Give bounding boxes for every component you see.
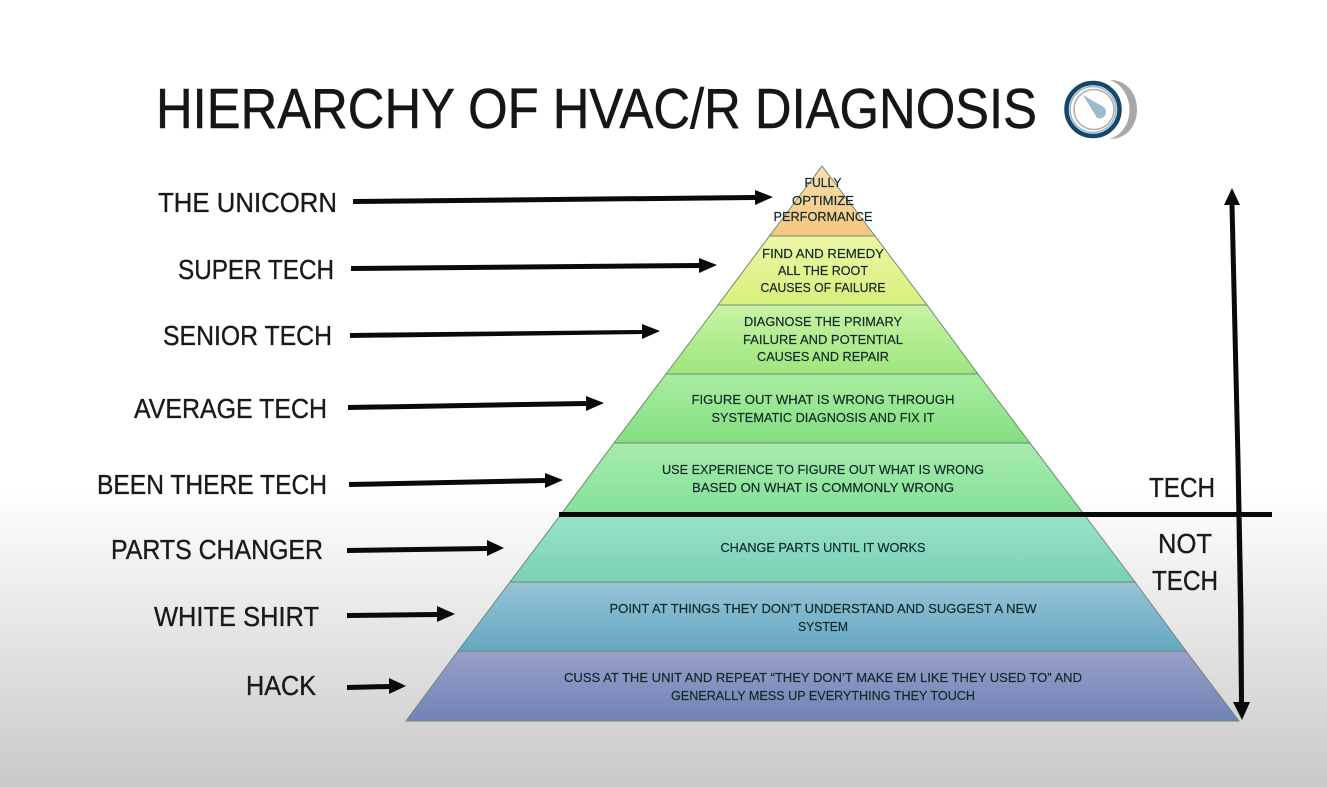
pyramid tier text: DIAGNOSE THE PRIMARY <box>744 314 902 329</box>
pyramid tier text <box>564 175 1082 703</box>
arrows from labels to tiers <box>347 190 773 694</box>
pyramid tier text: GENERALLY MESS UP EVERYTHING THEY TOUCH <box>671 688 975 703</box>
tech label: TECH <box>1149 472 1215 503</box>
pyramid tier text: FAILURE AND POTENTIAL <box>743 332 903 347</box>
tier 2: find and remedy <box>718 236 927 305</box>
pyramid tier text: ALL THE ROOT <box>778 263 868 278</box>
tier labels: WHITE SHIRT <box>154 601 319 632</box>
pyramid tier text: SYSTEM <box>798 619 848 634</box>
tier 5: use experience <box>562 443 1083 513</box>
tier labels: SUPER TECH <box>178 254 334 285</box>
tier labels: HACK <box>246 670 316 701</box>
tier labels: BEEN THERE TECH <box>97 469 327 500</box>
tier labels: AVERAGE TECH <box>134 393 327 424</box>
not tech label: TECH <box>1152 565 1218 596</box>
pyramid tier text: POINT AT THINGS THEY DON’T UNDERSTAND AND SUGGEST A NEW <box>610 601 1037 616</box>
not tech label <box>1152 528 1218 596</box>
tier 6: change parts <box>510 513 1135 582</box>
divider line: tech / not tech <box>559 512 1272 517</box>
pyramid tier text: CAUSES AND REPAIR <box>757 349 889 364</box>
tier 3: diagnose primary failure <box>666 305 978 374</box>
tier labels: SENIOR TECH <box>163 320 332 351</box>
pyramid tier text: CAUSES OF FAILURE <box>760 280 886 295</box>
pyramid tier text: OPTIMIZE <box>792 193 854 208</box>
pyramid tier text: PERFORMANCE <box>774 209 873 224</box>
tier 7: point at things <box>458 582 1186 651</box>
pyramid tier text: CUSS AT THE UNIT AND REPEAT “THEY DON’T MAKE EM LIKE THEY USED TO” AND <box>564 670 1082 685</box>
pyramid tier text: FIGURE OUT WHAT IS WRONG THROUGH <box>692 392 954 407</box>
pyramid tier text: SYSTEMATIC DIAGNOSIS AND FIX IT <box>712 410 935 425</box>
tier labels <box>97 187 337 701</box>
icon: gauge logo <box>1066 80 1137 139</box>
tier labels: PARTS CHANGER <box>111 534 323 565</box>
pyramid tier text: FIND AND REMEDY <box>762 246 884 261</box>
tier 4: figure out what is wrong <box>614 374 1030 443</box>
pyramid <box>406 166 1239 721</box>
tier 1: fully optimize performance <box>770 166 875 236</box>
tier 8: cuss at the unit <box>406 651 1239 721</box>
title: HIERARCHY OF HVAC/R DIAGNOSIS <box>156 77 1037 140</box>
vertical double arrow <box>1224 188 1250 720</box>
not tech label: NOT <box>1158 528 1212 559</box>
pyramid tier text: BASED ON WHAT IS COMMONLY WRONG <box>692 480 954 495</box>
pyramid tier text: FULLY <box>804 175 842 190</box>
pyramid tier text: CHANGE PARTS UNTIL IT WORKS <box>720 540 926 555</box>
pyramid tier text: USE EXPERIENCE TO FIGURE OUT WHAT IS WRONG <box>662 462 984 477</box>
tier labels: THE UNICORN <box>158 187 337 218</box>
